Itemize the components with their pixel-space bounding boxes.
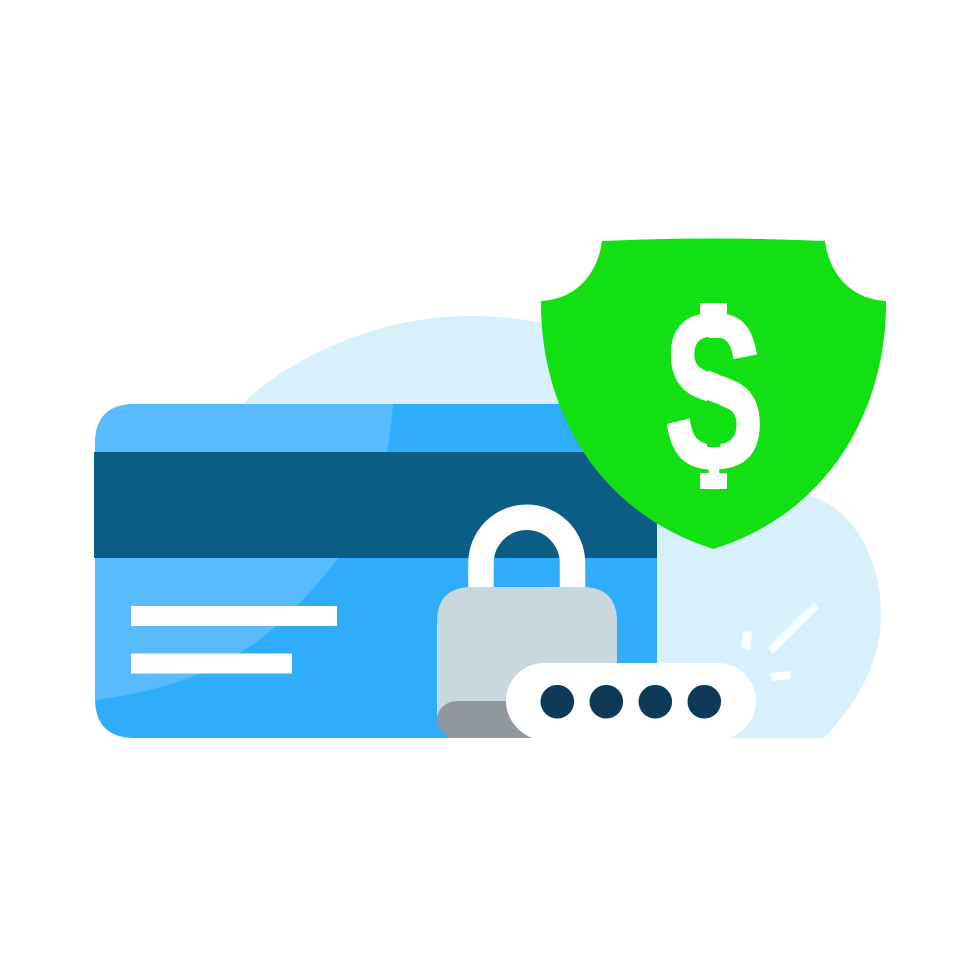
lock body: [437, 587, 617, 738]
password field: [506, 663, 756, 738]
illustration: secure credit card payment: [94, 238, 886, 738]
credit card: [90, 400, 657, 738]
card highlight: [90, 400, 393, 701]
password dots: [540, 685, 721, 718]
magnetic stripe: [94, 452, 657, 558]
shield: [541, 238, 886, 549]
padlock: [437, 517, 617, 738]
lock shade: [437, 701, 540, 738]
field pill: [506, 663, 756, 738]
card text lines: [131, 606, 337, 674]
dollar sign: $: [665, 262, 762, 521]
shackle: [481, 517, 572, 590]
card body: [95, 404, 657, 738]
sparkle lines: [741, 602, 820, 681]
shield with dollar sign: [541, 238, 886, 549]
background blob: [243, 316, 881, 738]
